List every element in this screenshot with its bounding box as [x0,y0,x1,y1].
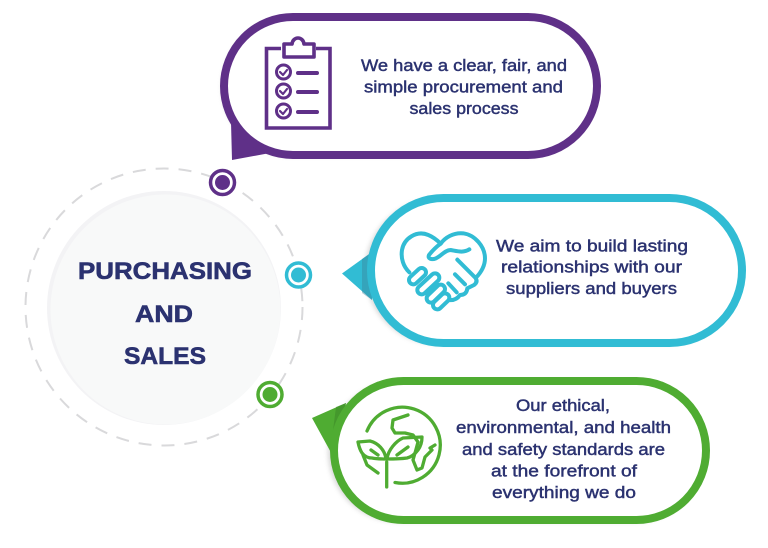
text: relationships: suppliers and buyers [506,280,677,298]
marker: green dot [258,382,282,406]
text: procurement: simple procurement and [364,78,563,96]
text: standards: environmental, and health [456,419,671,437]
panel: procurement callout [222,17,597,160]
text: standards: at the forefront of [491,462,637,480]
text: procurement: We have a clear, fair, and [361,57,567,75]
text: standards: Our ethical, [516,397,610,415]
title: purchasing and sales: PURCHASING [78,258,252,285]
title: purchasing and sales: AND [135,301,193,328]
title: purchasing and sales: SALES [124,343,206,370]
callout tail: green [312,403,346,458]
marker: purple dot [210,170,234,194]
panel: standards callout [312,381,706,522]
icon: earth and seedling [358,407,440,487]
icon: handshake heart [402,233,485,305]
callout tail: cyan [342,252,372,300]
text: procurement: sales process [410,100,518,118]
icon: clipboard checklist [266,38,330,128]
text: standards: and safety standards are [462,441,665,459]
text: relationships [496,238,688,298]
central circle with dashed ring [26,168,302,446]
text: procurement [361,57,567,118]
text: standards: everything we do [492,484,636,502]
text: relationships: relationships with our [501,258,683,276]
text: relationships: We aim to build lasting [496,238,688,256]
callout tail: purple [231,122,270,160]
title: purchasing and sales [78,258,252,370]
panel: relationships callout [342,198,742,344]
marker: cyan dot [286,263,310,287]
text: standards [456,397,671,502]
